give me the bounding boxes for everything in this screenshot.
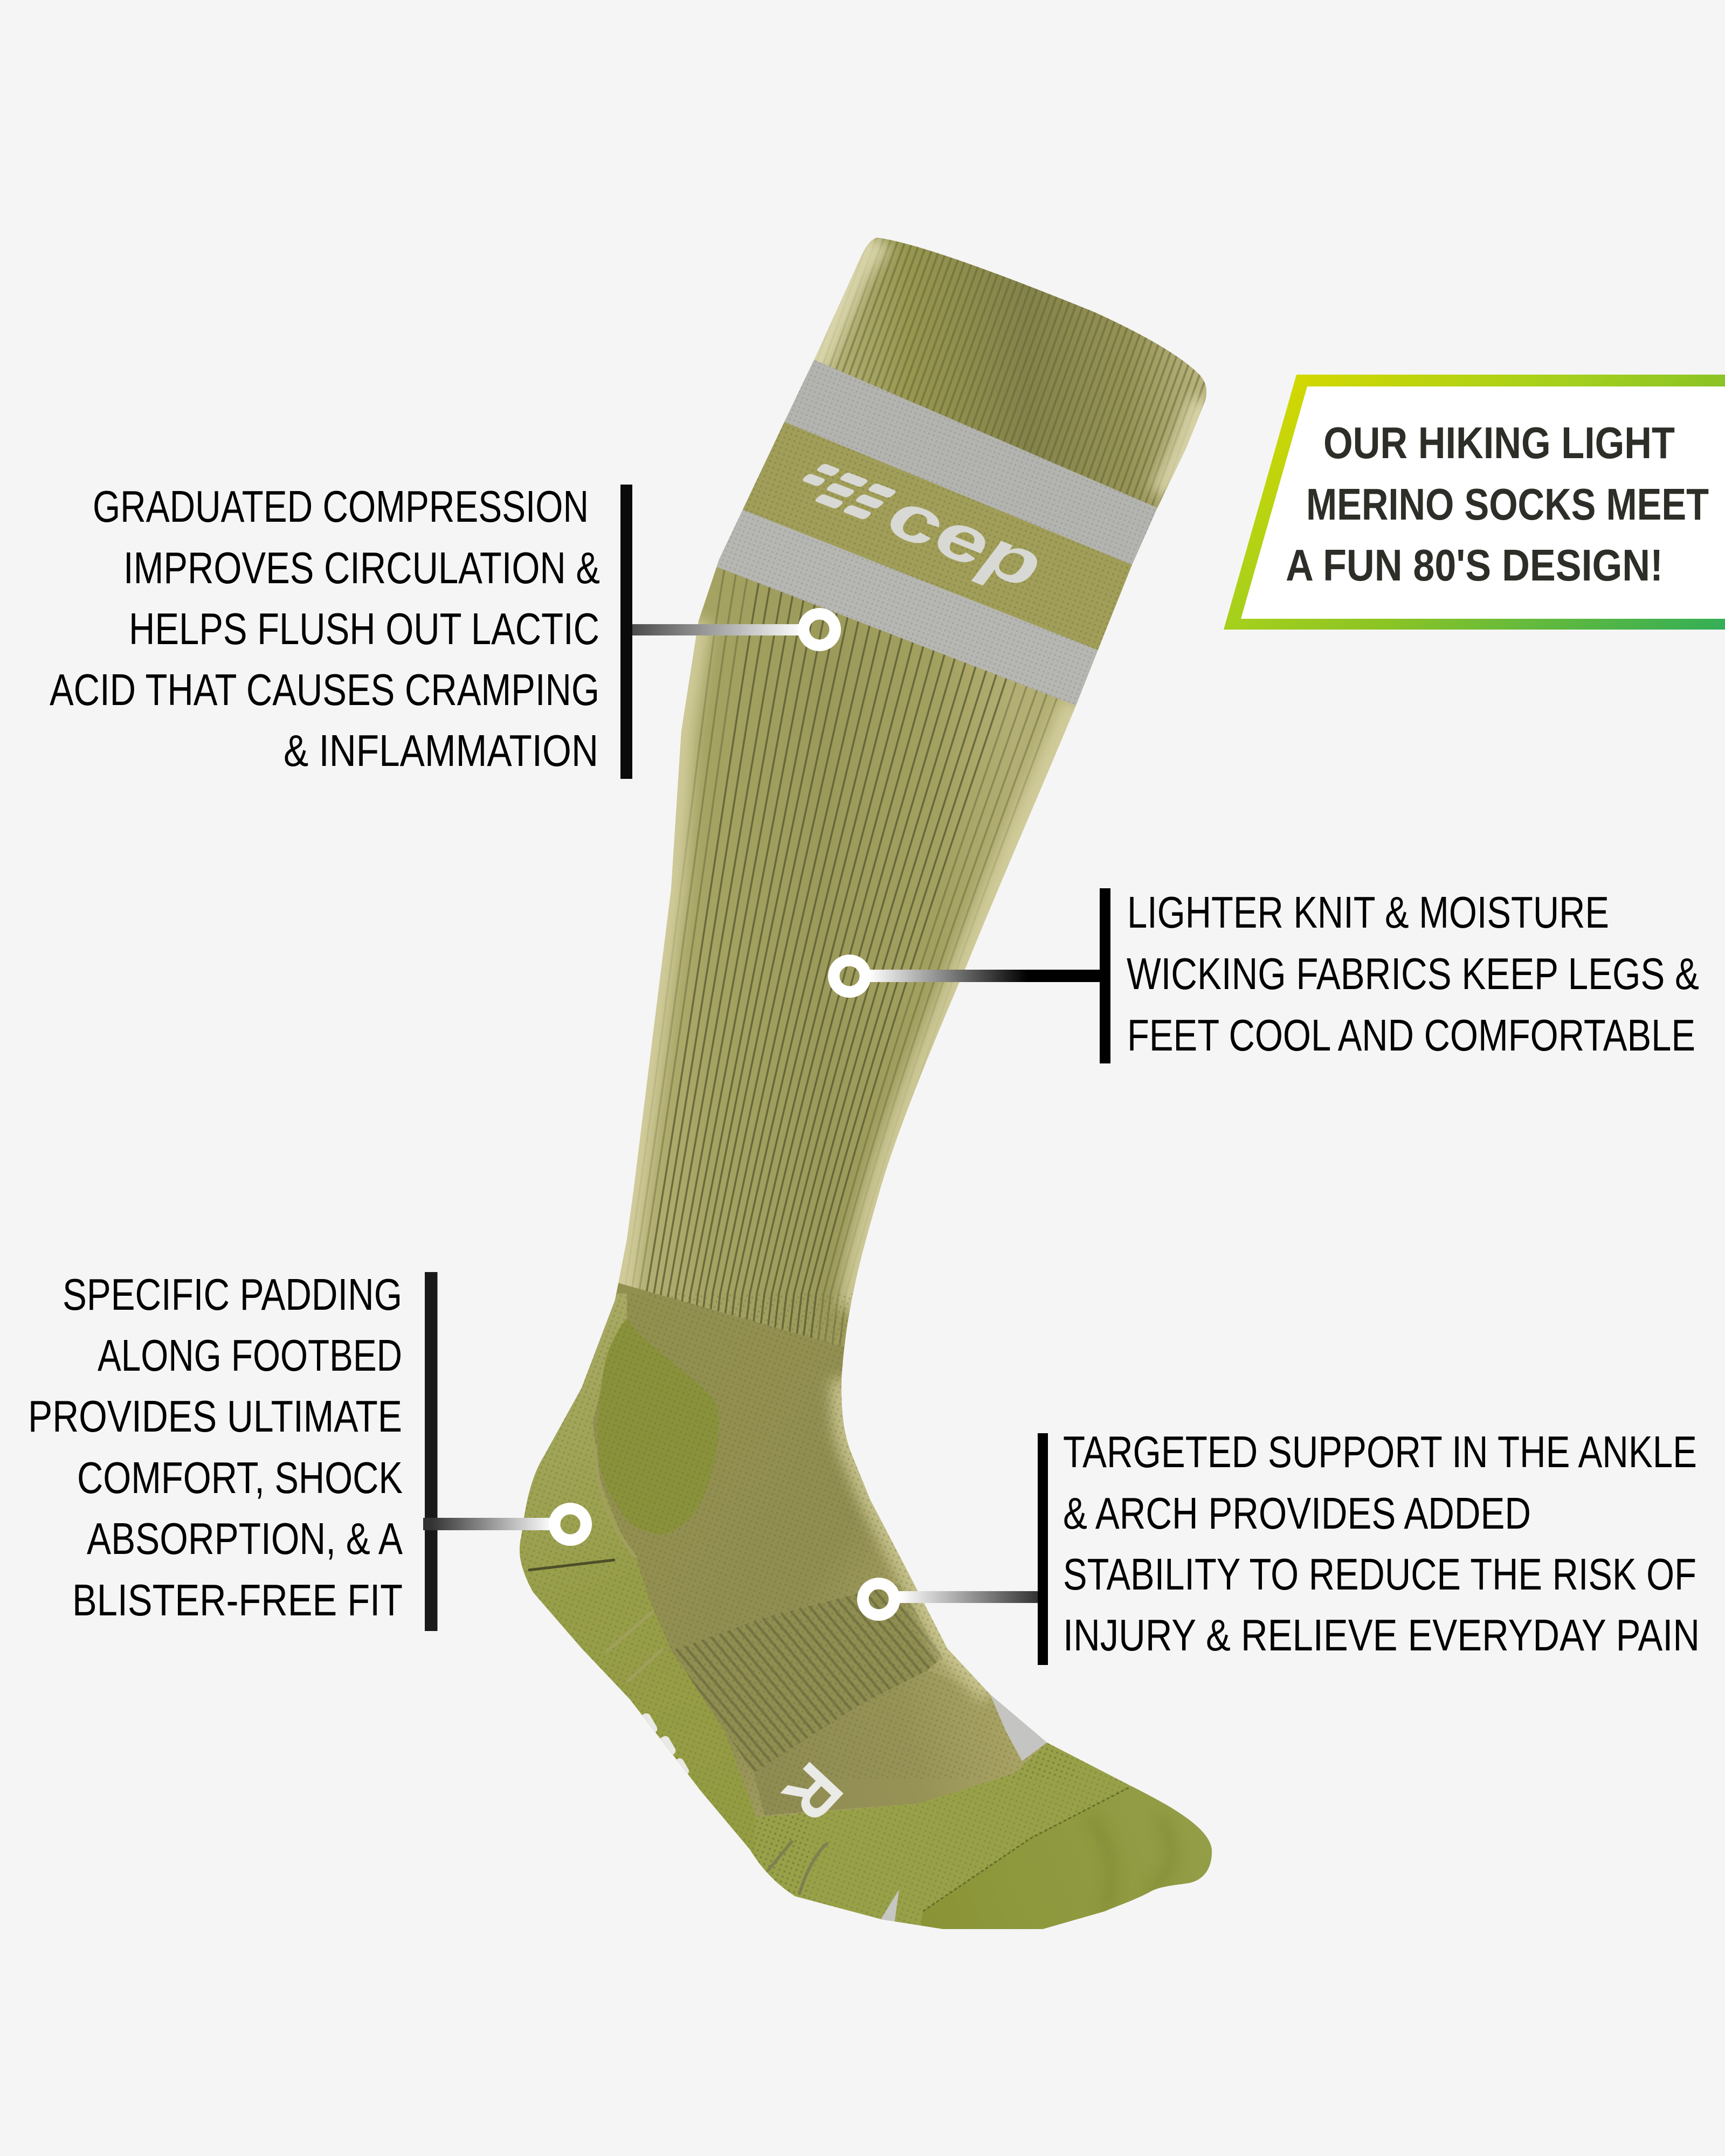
toe cap xyxy=(911,1787,1240,1994)
logo stripes xyxy=(789,462,898,520)
text block: SPECIFIC PADDING xyxy=(63,1269,402,1319)
grey toe patch xyxy=(880,1889,899,1924)
toe seam xyxy=(923,1787,1129,1911)
ankle light edge xyxy=(841,1379,990,1695)
connector line xyxy=(628,624,806,635)
callout: graduated compression xyxy=(50,481,835,779)
white sole marks xyxy=(636,1712,691,1778)
leg light edge right xyxy=(854,704,1077,1310)
text block: COMFORT, SHOCK xyxy=(77,1453,403,1503)
gradient frame xyxy=(1224,375,1725,630)
heel crease xyxy=(528,1560,615,1570)
callout: lighter knit xyxy=(834,887,1699,1063)
foot mesh texture xyxy=(485,1294,1078,1940)
connector line xyxy=(898,1591,1038,1603)
callout: specific padding xyxy=(28,1269,586,1631)
ribbed hexagon panel xyxy=(671,1583,942,1773)
connector line xyxy=(868,970,1110,982)
cep logo xyxy=(789,462,1052,603)
headline badge xyxy=(1224,375,1725,630)
headline text xyxy=(1286,418,1709,590)
text block: BLISTER-FREE FIT xyxy=(72,1575,403,1625)
text block xyxy=(1063,1427,1700,1660)
text block xyxy=(1127,887,1699,1060)
text block xyxy=(28,1269,403,1625)
divider bar xyxy=(620,485,632,779)
text block xyxy=(50,481,600,776)
toe side seams xyxy=(768,1841,828,1894)
grey stripe lower xyxy=(674,482,1240,769)
text block: HELPS FLUSH OUT LACTIC xyxy=(129,604,599,654)
text block: GRADUATED COMPRESSION xyxy=(93,481,589,531)
size letter R: R xyxy=(769,1749,857,1835)
grey top-of-foot patch xyxy=(990,1695,1047,1761)
heel padding patch xyxy=(598,1318,719,1535)
grey stripe upper xyxy=(701,311,1240,609)
text block: ABSORPTION, & A xyxy=(87,1514,403,1564)
middle olive band xyxy=(743,421,1132,650)
toe box xyxy=(755,1743,1240,1994)
ankle mesh xyxy=(485,1276,1240,1994)
leg ribbing xyxy=(617,561,1101,1358)
text block: & ARCH PROVIDES ADDED xyxy=(1063,1488,1531,1538)
leg light edge left xyxy=(620,621,699,1304)
text block: ACID THAT CAUSES CRAMPING xyxy=(50,665,599,715)
text block: LIGHTER KNIT & MOISTURE xyxy=(1127,887,1609,937)
callout: targeted support xyxy=(863,1427,1700,1665)
text block: IMPROVES CIRCULATION & xyxy=(123,543,600,593)
marker ring xyxy=(834,960,865,992)
divider bar xyxy=(1038,1433,1048,1665)
white panel xyxy=(1241,386,1725,619)
logo wordmark: cep xyxy=(879,476,1052,603)
dorsal foot panel xyxy=(754,1670,1047,1815)
text block: & INFLAMMATION xyxy=(284,725,598,776)
toe creases xyxy=(1089,1816,1172,1911)
sock leg xyxy=(618,539,1100,1347)
heel and sole zone xyxy=(485,1294,809,1940)
divider bar xyxy=(425,1272,438,1631)
text block: ALONG FOOTBED xyxy=(98,1330,402,1380)
heel seams xyxy=(596,1445,663,1682)
marker ring xyxy=(863,1584,894,1615)
connector line xyxy=(423,1518,553,1530)
cuff xyxy=(810,238,1206,508)
headline text: A FUN 80'S DESIGN! xyxy=(1286,540,1663,590)
marker ring xyxy=(804,614,835,645)
divider bar xyxy=(1100,888,1110,1063)
text block: PROVIDES ULTIMATE xyxy=(28,1391,402,1441)
marker ring xyxy=(555,1509,586,1540)
compression sock product image xyxy=(520,238,1212,1929)
